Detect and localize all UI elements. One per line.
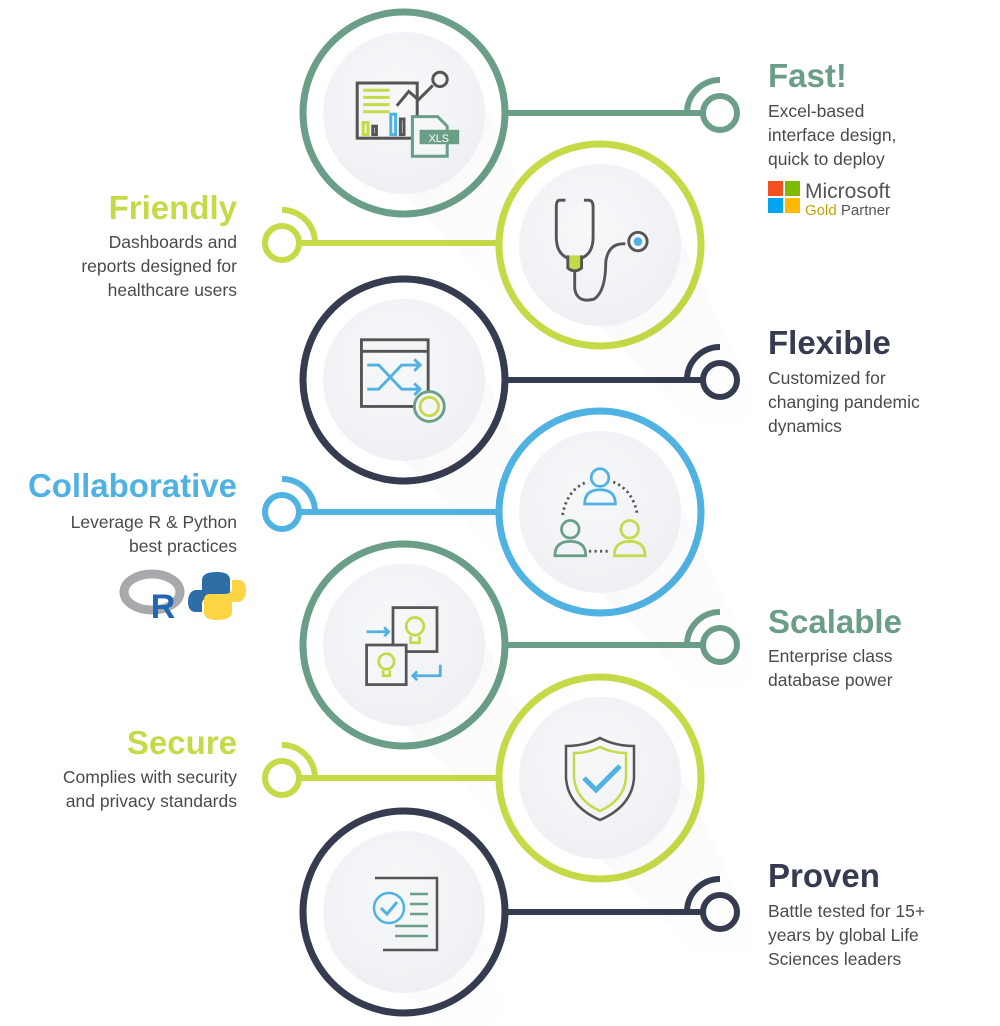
text: collaborative: Collaborative [28,467,237,504]
text: friendly: reports designed for [81,256,237,276]
text: friendly [81,189,238,300]
text: proven [768,857,925,969]
circle: scalable [303,544,570,822]
icon: document check [374,878,437,950]
text: flexible: Customized for [768,368,886,388]
text: flexible: Flexible [768,324,891,361]
icon: stethoscope [556,200,647,300]
connector: scalable [505,612,737,662]
text: secure [63,724,237,811]
connector: fast [505,80,737,130]
connector: collaborative [265,479,500,529]
icon: excel chart [357,72,459,156]
circle: proven [303,811,510,1026]
logo: microsoft gold partner: Gold Partner [805,202,890,219]
text: fast: interface design, [768,125,896,145]
text: fast: Fast! [768,57,847,94]
connector: flexible [505,347,737,397]
icon: excel chart: XLS [429,133,449,145]
text: proven: years by global Life [768,925,919,945]
text: fast: Excel-based [768,101,864,121]
text: scalable: Scalable [768,603,902,640]
text: proven: Battle tested for 15+ [768,901,925,921]
circle: fast [303,12,570,290]
logo: R and python: R [151,588,175,626]
text: collaborative: best practices [129,536,237,556]
text: flexible: changing pandemic [768,392,920,412]
icon: calendar shuffle [361,340,444,421]
connector: friendly [265,210,500,260]
text: fast [768,57,896,169]
text: collaborative: Leverage R & Python [71,512,237,532]
icon: shield check [566,738,634,820]
text: flexible [768,324,920,436]
circle: secure [499,677,766,955]
circle: collaborative [499,411,766,689]
text: fast: quick to deploy [768,149,885,169]
text: secure: Secure [127,724,237,761]
circle: flexible [303,279,570,557]
text: friendly: Dashboards and [109,232,237,252]
text: secure: Complies with security [63,767,237,787]
text: collaborative [28,467,237,556]
logo: microsoft gold partner: Microsoft [805,180,890,203]
text: friendly: Friendly [109,189,238,226]
icon: people network [555,469,645,556]
connector: secure [265,745,500,795]
connector: proven [505,879,737,929]
text: scalable: Enterprise class [768,646,893,666]
text: friendly: healthcare users [108,280,237,300]
logo: microsoft gold partner [768,180,890,219]
icon: ideas exchange [367,608,440,685]
text: flexible: dynamics [768,416,842,436]
logo: R and python [124,572,246,626]
text: proven: Proven [768,857,880,894]
text: scalable: database power [768,670,893,690]
circle: friendly [499,144,766,422]
text: scalable [768,603,902,690]
text: secure: and privacy standards [66,791,237,811]
text: proven: Sciences leaders [768,949,902,969]
